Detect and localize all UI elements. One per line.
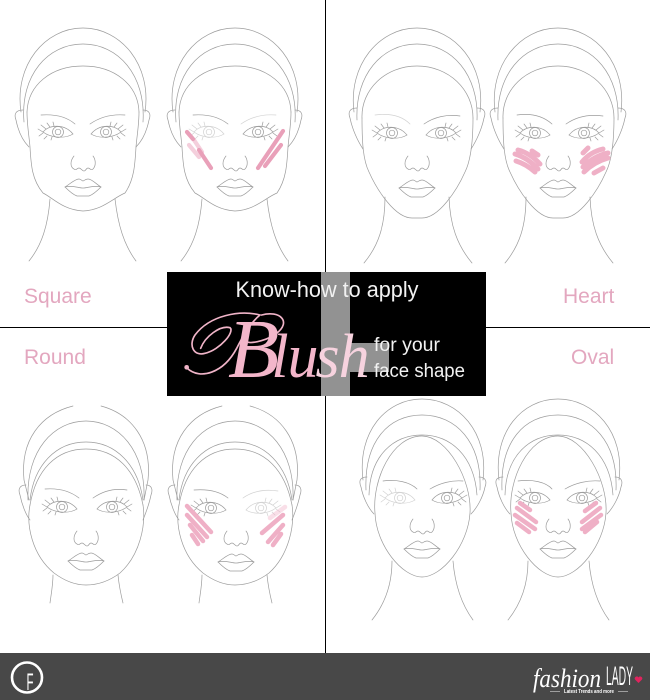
heading: know-how: Know-how to apply bbox=[236, 277, 418, 302]
label: Round: Round bbox=[24, 346, 86, 369]
face: round with blush bbox=[168, 406, 301, 603]
label: Square: Square bbox=[24, 285, 92, 308]
footer bar bbox=[0, 653, 650, 700]
title banner bbox=[167, 272, 486, 396]
panel: oval face shape bbox=[360, 346, 622, 620]
logo: fashion lady bbox=[533, 661, 642, 695]
face: heart with blush bbox=[490, 28, 626, 263]
face: square with blush bbox=[167, 28, 302, 261]
icon: F circle logo: F bbox=[26, 669, 34, 696]
heading: for your face shape: face shape bbox=[374, 361, 465, 382]
panel: round face shape bbox=[19, 346, 301, 603]
heading: for your face shape bbox=[374, 335, 465, 382]
face: oval without blush bbox=[360, 399, 486, 620]
face: oval with blush bbox=[496, 399, 622, 620]
icon: F circle logo bbox=[12, 662, 42, 696]
panel: heart face shape bbox=[349, 28, 626, 308]
logo: fashion lady: Latest Trends and more bbox=[564, 689, 614, 695]
icon: heart bbox=[635, 676, 642, 683]
logo: fashion lady: fashion bbox=[533, 664, 601, 693]
heading: Blush script: Blush bbox=[228, 303, 369, 396]
panel: square face shape bbox=[15, 28, 302, 308]
heading: for your face shape: for your bbox=[374, 335, 441, 356]
label: Oval: Oval bbox=[571, 346, 614, 369]
face: square without blush bbox=[15, 28, 150, 261]
label: Heart: Heart bbox=[563, 285, 615, 308]
face: round without blush bbox=[19, 406, 152, 603]
grey cross behind the title bbox=[321, 272, 389, 396]
face: heart without blush bbox=[349, 28, 485, 263]
